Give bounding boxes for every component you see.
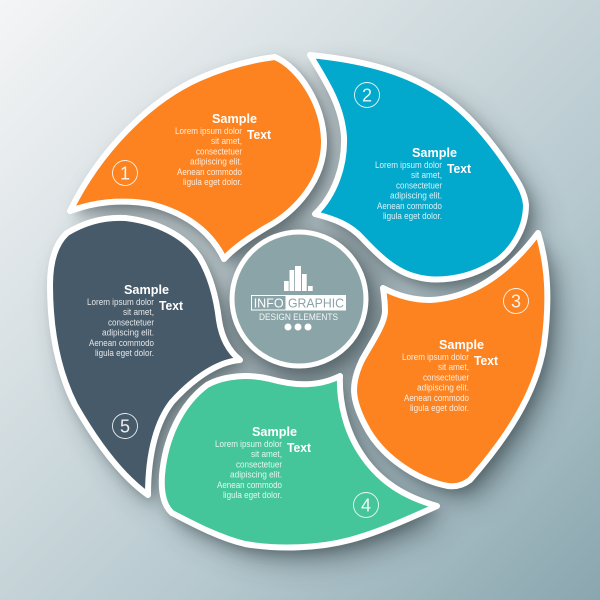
text block 4	[215, 424, 312, 500]
text block 2: consectetuer	[396, 180, 442, 190]
wide soft shadow	[62, 69, 559, 561]
number 5	[112, 414, 138, 438]
text block 3: Lorem ipsum dolor	[402, 352, 469, 362]
logo wordmark	[252, 295, 346, 310]
number 1: 1	[120, 164, 130, 184]
text block 1: Sample	[212, 111, 257, 126]
text block 3: Text	[474, 353, 499, 368]
text block 4: Sample	[252, 424, 297, 439]
text block 5: Aenean commodo	[89, 338, 154, 348]
text block 3: Sample	[439, 337, 484, 352]
segment 2: blue	[310, 55, 526, 279]
text block 2: ligula eget dolor.	[383, 211, 442, 221]
text block 3	[402, 337, 499, 413]
number 2	[354, 82, 380, 108]
text block 2	[375, 145, 472, 221]
text block 3: sit amet,	[438, 362, 469, 372]
text block 1: Text	[247, 127, 272, 142]
segment 4: green	[162, 376, 437, 547]
number 1	[112, 160, 138, 186]
text block 4: adipiscing elit.	[230, 470, 282, 480]
segment 3: orange	[354, 233, 547, 486]
close shadow	[55, 61, 552, 553]
text block 3: adipiscing elit.	[417, 383, 469, 393]
number 4: 4	[361, 496, 371, 516]
text block 5	[87, 282, 184, 358]
text block 4: sit amet,	[251, 449, 282, 459]
number 4	[354, 492, 378, 518]
text block 5: Text	[159, 298, 184, 313]
text block 5: Sample	[124, 282, 169, 297]
text block 2: adipiscing elit.	[390, 191, 442, 201]
text block 2: Aenean commodo	[377, 201, 442, 211]
text block 5: consectetuer	[108, 318, 154, 328]
text block 5: ligula eget dolor.	[95, 348, 154, 358]
text block 3: consectetuer	[423, 372, 469, 382]
text block 3: Aenean commodo	[404, 393, 469, 403]
text block 1: Lorem ipsum dolor	[175, 126, 242, 136]
number 3	[504, 288, 528, 314]
text block 1: sit amet,	[211, 136, 242, 146]
center hub	[232, 232, 366, 366]
text block 2: Sample	[412, 145, 457, 160]
text block 4: Aenean commodo	[217, 480, 282, 490]
text block 1: consectetuer	[196, 146, 242, 156]
text block 2: Text	[447, 161, 472, 176]
number 5: 5	[120, 416, 130, 436]
dots	[284, 324, 312, 330]
text block 1: ligula eget dolor.	[183, 177, 242, 187]
logo wordmark: INFO	[254, 296, 284, 310]
text block 2: Lorem ipsum dolor	[375, 160, 442, 170]
segment 1: orange	[70, 57, 324, 259]
text block 5: adipiscing elit.	[102, 328, 154, 338]
number 3: 3	[511, 292, 521, 312]
text block 1: adipiscing elit.	[190, 157, 242, 167]
subtitle: DESIGN ELEMENTS	[259, 312, 338, 323]
text block 4: consectetuer	[236, 460, 282, 470]
text block 5: sit amet,	[123, 307, 154, 317]
text block 4: ligula eget dolor.	[223, 490, 282, 500]
text block 1	[175, 111, 272, 187]
segment 5: slate	[50, 218, 240, 495]
number 2: 2	[362, 86, 372, 106]
text block 4: Lorem ipsum dolor	[215, 439, 282, 449]
icon: bar chart logo	[284, 266, 313, 291]
text block 3: ligula eget dolor.	[410, 403, 469, 413]
text block 5: Lorem ipsum dolor	[87, 297, 154, 307]
text block 2: sit amet,	[411, 170, 442, 180]
text block 1: Aenean commodo	[177, 167, 242, 177]
text block 4: Text	[287, 440, 312, 455]
logo wordmark: GRAPHIC	[288, 296, 344, 310]
